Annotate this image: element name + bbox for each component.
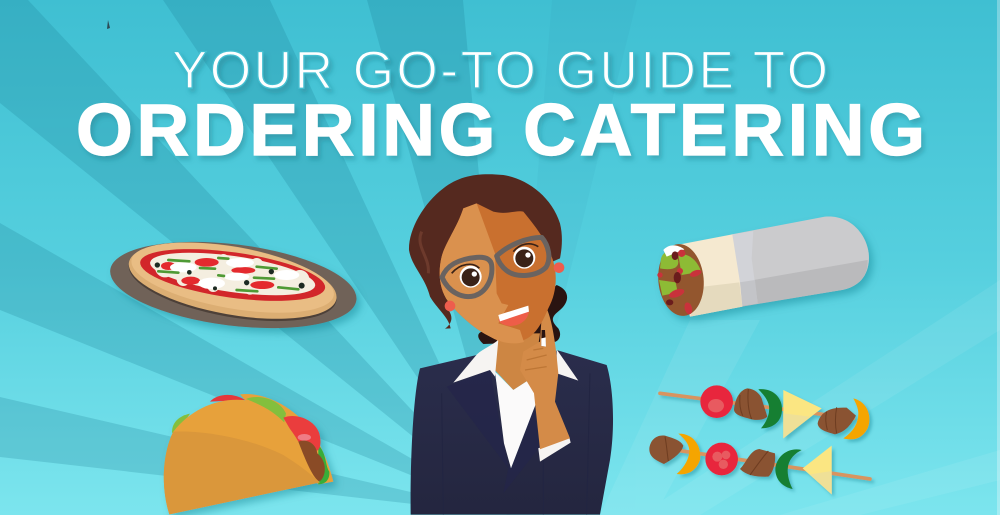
- pizza crust: [123, 229, 342, 332]
- illustration: skewers: [649, 385, 870, 494]
- mouth: [498, 306, 529, 326]
- illustration: pizza: [105, 229, 361, 340]
- character: woman: [409, 174, 613, 515]
- illustration: taco: [164, 394, 333, 514]
- taco front shell: [164, 400, 320, 514]
- title: [76, 41, 925, 171]
- back hair bun: [478, 285, 567, 344]
- pizza sauce: [137, 240, 328, 310]
- eyes: [452, 244, 538, 288]
- face: [440, 203, 556, 343]
- blazer: [411, 350, 613, 515]
- glasses: [442, 237, 549, 297]
- taco fillings: [172, 395, 329, 484]
- pizza plate: [105, 230, 361, 340]
- burrito filling: [655, 242, 707, 318]
- pizza toppings: [155, 258, 305, 291]
- hair: [409, 174, 562, 329]
- burrito tortilla: [668, 234, 742, 317]
- neck: [492, 333, 540, 390]
- title line 2: ORDERING CATERING: [76, 90, 925, 171]
- bottom skewer: [649, 434, 870, 494]
- pizza cheese: [148, 245, 318, 303]
- top skewer: [660, 385, 869, 439]
- burrito foil: [732, 216, 869, 307]
- taco back shell: [240, 394, 333, 484]
- illustration: burrito: [655, 216, 869, 318]
- fingernail: [541, 330, 546, 347]
- title line 1: YOUR GO-TO GUIDE TO: [172, 41, 828, 100]
- collar: [453, 340, 578, 383]
- cuff: [538, 437, 571, 462]
- earrings: [445, 262, 564, 311]
- shirt: [495, 372, 537, 468]
- arm and hand: [520, 305, 570, 449]
